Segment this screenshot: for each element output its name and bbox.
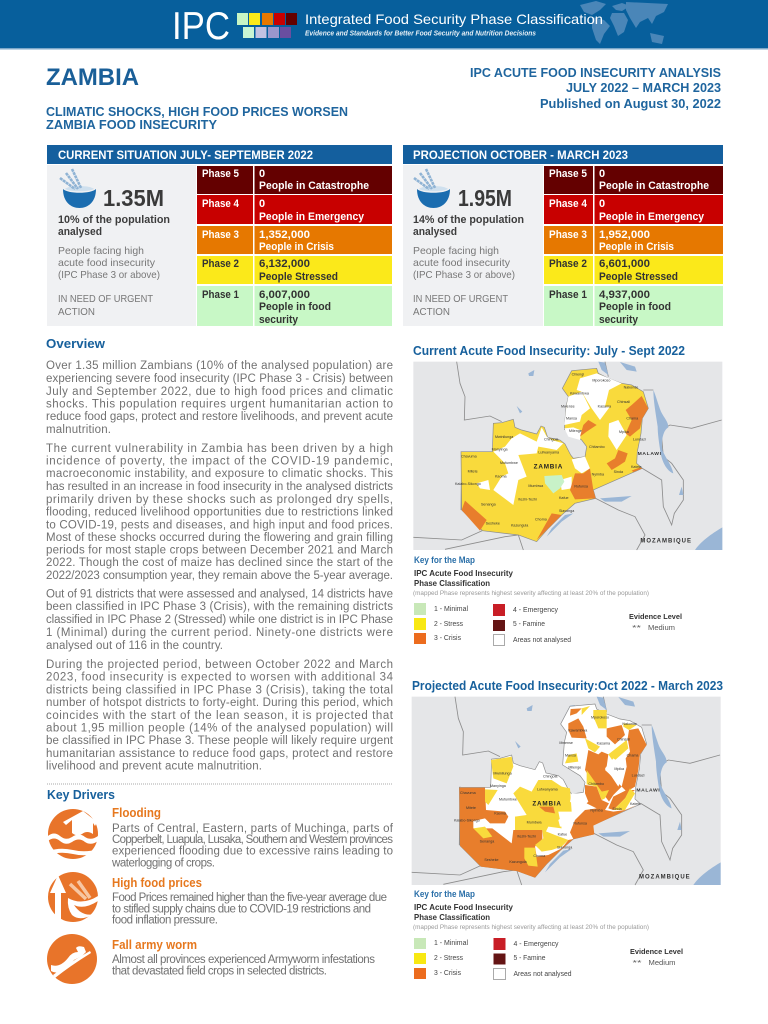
description: experienced flooding due to excessive rains leading to <box>112 846 393 858</box>
banner title: Integrated Food Security Phase Classification <box>305 11 603 27</box>
overview text block: 2022/2023 consumption year, they remain above the 5-year average. <box>46 570 393 582</box>
description: Copperbelt, Luapula, Lusaka, Southern and Western provinces <box>112 834 393 846</box>
map key: current: Phase Classification <box>414 578 490 588</box>
map: projected acute food insecurity <box>412 697 721 885</box>
logo colour squares <box>237 13 297 38</box>
map key: current: IPC Acute Food Insecurity <box>414 568 513 578</box>
phase 1 row: People in food <box>599 301 671 313</box>
summary box: IN NEED OF URGENT <box>413 293 509 305</box>
headline number: 1.35M <box>103 185 164 211</box>
map: current acute food insecurity: Mansa <box>566 417 578 421</box>
map: projected acute food insecurity: Sesheke <box>484 858 499 862</box>
map: projected acute food insecurity: Lundazi <box>632 774 645 778</box>
analysis title and dates <box>470 66 721 111</box>
map: projected acute food insecurity: Kaoma <box>494 811 507 815</box>
overview text block: malnutrition. <box>46 424 111 436</box>
overview text block: analysed out of 116 in the country. <box>46 640 223 652</box>
description <box>112 892 387 926</box>
map key: projected: Key for the Map <box>414 889 475 899</box>
map key: current: 3 - Crisis <box>434 635 461 642</box>
phase 2 row: People Stressed <box>259 271 338 283</box>
map: projected acute food insecurity: Sinda <box>612 807 623 811</box>
map: current acute food insecurity: Chama <box>626 417 639 421</box>
overview text block: The current vulnerability in Zambia has been driven by a high <box>46 443 393 455</box>
panel header <box>403 145 723 164</box>
summary box: ACTION <box>58 306 95 318</box>
map: projected acute food insecurity: Milenge <box>568 766 581 770</box>
map: current acute food insecurity: Choma <box>535 517 548 521</box>
panel header: CURRENT SITUATION JULY- SEPTEMBER 2022 <box>58 148 313 162</box>
panel header: PROJECTION OCTOBER - MARCH 2023 <box>413 148 628 162</box>
phase 2 row <box>544 256 723 284</box>
map key: current: Evidence Level <box>629 612 682 621</box>
driver: flooding <box>48 805 394 870</box>
map key: projected: Medium <box>648 958 676 967</box>
summary box: 10% of the population <box>58 214 170 226</box>
phase 1 row: Phase 1 <box>549 289 587 301</box>
map: projected acute food insecurity: Mporokoso <box>591 716 609 720</box>
phase 4 row: Phase 4 <box>202 198 240 210</box>
phase 3 row: 1,352,000 <box>259 229 310 241</box>
description: to stifled supply chains due to COVID-19 restrictions and <box>112 904 371 916</box>
map: projected acute food insecurity: Mufumbwe <box>499 798 517 802</box>
overview text block: to COVID-19, pests and diseases, and high input and food prices. <box>46 520 393 532</box>
map: projected acute food insecurity: Senanga <box>480 839 495 843</box>
phase 4 row: 0 <box>599 198 605 210</box>
map: current acute food insecurity: Chingola <box>544 438 559 442</box>
map: current acute food insecurity: Mumbwa <box>528 484 544 488</box>
map: current acute food insecurity: Kalabo-Sikongo <box>455 482 481 486</box>
map key: projected: 4 - Emergency <box>514 941 559 948</box>
map: current acute food insecurity: Mitete <box>468 469 478 473</box>
map: projected acute food insecurity: MOZAMBIQUE <box>639 875 690 881</box>
description <box>112 954 375 978</box>
overview text block: 2023, food insecurity is expected to worsen with additional 34 <box>46 672 394 684</box>
phase 1 row <box>544 286 723 326</box>
map key: current: (mapped Phase represents highest severity affecting at least 20% of the population) <box>413 590 649 597</box>
overview text block: has resulted in an increase in food insecurity in the analysed districts <box>46 481 393 493</box>
analysis title and dates: IPC ACUTE FOOD INSECURITY ANALYSIS <box>470 66 721 80</box>
map: current acute food insecurity: Sinda <box>614 470 624 474</box>
map: current acute food insecurity: Chavuma <box>461 454 478 458</box>
map: current acute food insecurity: MALAWI <box>638 451 662 457</box>
phase 4 row: Phase 4 <box>549 198 588 210</box>
map: projected acute food insecurity: Lufwanyama <box>537 787 559 791</box>
icon: flooded house <box>48 809 98 859</box>
overview text block: 2022. Though the cost of maize has declined since the start of the <box>46 557 393 569</box>
map: current acute food insecurity: Kazungula <box>511 524 529 528</box>
map: projected acute food insecurity: Mwense <box>559 741 573 745</box>
map: current acute food insecurity: Milenge <box>569 429 582 433</box>
icon: worm <box>47 934 97 984</box>
phase 4 row: People in Emergency <box>599 211 705 223</box>
map: current acute food insecurity: ZAMBIA <box>534 464 563 471</box>
overview text block: July and September 2022, due to high food prices and climatic <box>46 386 393 398</box>
phase 1 row <box>197 286 392 326</box>
projected map heading: Projected Acute Food Insecurity:Oct 2022 - March 2023 <box>412 678 723 693</box>
map: projected acute food insecurity: Rufunsa <box>573 821 588 825</box>
map key: projected: Phase Classification <box>414 912 490 922</box>
phase 5 row: 0 <box>599 168 605 180</box>
summary box: (IPC Phase 3 or above) <box>58 269 160 281</box>
panel header <box>47 145 392 164</box>
overview text block: humanitarian assistance to reduce food gaps, protect and restore <box>46 748 393 760</box>
summary box: acute food insecurity <box>413 257 511 269</box>
heading: High food prices <box>112 875 202 890</box>
map key: current: Medium <box>648 623 675 632</box>
overview text block: macroeconomic instability, and exposure to climatic shocks. This <box>46 468 393 480</box>
map key: projected: IPC Acute Food Insecurity <box>414 902 513 912</box>
map key: current: Key for the Map <box>414 555 475 565</box>
map: projected acute food insecurity: Chingola <box>543 775 558 779</box>
overview text block: During the projected period, between October 2022 and March <box>46 659 393 671</box>
map: current acute food insecurity: Lundazi <box>633 437 646 441</box>
driver: fall army worm <box>47 934 375 984</box>
overview text block: about 1,95 million people (14% of the analysed population) will <box>46 722 393 734</box>
map: projected acute food insecurity: Chama <box>627 753 639 757</box>
overview text block: classified in IPC Phase 2 (Stressed) while one district is in IPC Phase <box>46 614 393 626</box>
summary box <box>47 165 196 326</box>
map: projected acute food insecurity: Chitambo <box>588 782 604 786</box>
analysis title and dates: JULY 2022 – MARCH 2023 <box>566 81 721 95</box>
summary box: ACTION <box>413 306 450 318</box>
phase 3 row <box>197 226 392 254</box>
subtitle <box>46 105 348 132</box>
map: projected acute food insecurity: ZAMBIA <box>532 800 561 807</box>
phase 3 row: Phase 3 <box>549 229 587 241</box>
overview text block: shocks. This population requires urgent humanitarian action to <box>46 398 393 410</box>
current map heading: Current Acute Food Insecurity: July - Sept 2022 <box>413 343 685 358</box>
summary box: analysed <box>413 226 457 238</box>
map: current acute food insecurity: Itezhi-Tezhi <box>518 498 537 502</box>
phase 5 row: People in Catastrophe <box>599 180 709 192</box>
map: projected acute food insecurity: Mansa <box>565 753 577 757</box>
description: that devastated field crops in selected districts. <box>112 966 327 978</box>
description: food inflation pressure. <box>112 914 218 926</box>
summary box: 14% of the population <box>413 214 524 226</box>
map key: projected: 2 - Stress <box>434 955 463 962</box>
map key: projected: (mapped Phase represents highest severity affecting at least 20% of the population) <box>413 924 649 931</box>
phase 3 row <box>544 226 723 254</box>
phase 2 row: 6,132,000 <box>259 258 310 270</box>
map key: projected <box>413 889 683 980</box>
map: current acute food insecurity: Kawambwa <box>570 392 590 396</box>
map: current acute food insecurity: Katete <box>631 465 642 469</box>
map: current acute food insecurity: Siavonga <box>559 509 575 513</box>
map: current acute food insecurity: Kafue <box>559 496 569 500</box>
phase 2 row <box>197 256 392 284</box>
map: current acute food insecurity: Mporokoso <box>592 378 610 382</box>
phase 3 row: Phase 3 <box>202 229 239 241</box>
map: projected acute food insecurity: Mitete <box>466 806 476 810</box>
overview text block: Most of these shocks occurred during the flowering and grain filling <box>46 532 393 544</box>
description: Almost all provinces experienced Armyworm infestations <box>112 954 375 966</box>
map: current acute food insecurity: Nyimba <box>592 472 605 476</box>
overview text block: flooding, reduced livelihood opportunities due to restrictions linked <box>46 506 393 518</box>
phase 5 row: Phase 5 <box>202 168 239 180</box>
map: projected acute food insecurity: Kawambwa <box>568 729 588 733</box>
analysis title and dates: Published on August 30, 2022 <box>540 97 721 111</box>
panel: projection <box>403 145 723 326</box>
map key: projected: Areas not analysed <box>514 971 572 978</box>
banner tagline: Evidence and Standards for Better Food Security and Nutrition Decisions <box>305 28 536 38</box>
overview text block: incidence of poverty, the impact of the COVID-19 pandemic, <box>46 456 393 468</box>
icon: bowl with wheat <box>414 169 450 208</box>
description: waterlogging of crops. <box>111 858 215 870</box>
map: current acute food insecurity: Mpika <box>619 430 630 434</box>
heading: Fall army worm <box>112 937 197 952</box>
map: projected acute food insecurity: MALAWI <box>636 787 660 793</box>
map: projected acute food insecurity: Chavuma <box>460 791 477 795</box>
icon: bowl with wheat <box>60 169 96 208</box>
summary box: acute food insecurity <box>58 257 156 269</box>
map: current acute food insecurity: Chinsali <box>617 400 630 404</box>
headline number: 1.95M <box>458 185 512 211</box>
icon: rising arrow and bowl <box>48 872 98 922</box>
map: current acute food insecurity: Lufwanyama <box>538 451 560 455</box>
subtitle: ZAMBIA FOOD INSECURITY <box>46 118 218 132</box>
map key: current: ** <box>632 623 641 632</box>
map key: projected: ** <box>632 958 642 967</box>
phase 3 row: 1,952,000 <box>599 229 650 241</box>
map: current acute food insecurity: Mwinilunga <box>495 435 514 439</box>
phase 1 row: 6,007,000 <box>259 289 310 301</box>
map: current acute food insecurity: Rufunsa <box>574 485 589 489</box>
map: projected acute food insecurity: Nakonde <box>622 722 637 726</box>
panel: current situation <box>47 145 392 326</box>
description: Parts of Central, Eastern, parts of Muchinga, parts of <box>112 823 394 835</box>
overview text block: number of hotspot districts to forty-eight. During this period, which <box>46 697 393 709</box>
map: projected acute food insecurity: Choma <box>533 854 546 858</box>
driver: high food prices <box>48 872 387 926</box>
map: current acute food insecurity: Kasama <box>598 404 612 408</box>
map: current acute food insecurity: MOZAMBIQUE <box>640 539 691 545</box>
phase 3 row: People in Crisis <box>259 241 334 253</box>
map: projected acute food insecurity: Siavonga <box>557 846 573 850</box>
map: current acute food insecurity: Senanga <box>481 503 497 507</box>
overview text block: periods for most staple crops between December 2021 and March <box>46 544 393 556</box>
overview text block: Over 1.35 million Zambians (10% of the analysed population) are <box>46 360 393 372</box>
summary box: IN NEED OF URGENT <box>58 293 154 305</box>
overview text block: 1 (Minimal) during the current period. Ninety-one districts were <box>46 627 393 639</box>
phase 2 row: People Stressed <box>599 271 678 283</box>
map: projected acute food insecurity: Manyinga <box>490 784 507 788</box>
phase 1 row: security <box>599 314 639 326</box>
map: current acute food insecurity <box>413 362 722 550</box>
map: current acute food insecurity: Chitambo <box>589 445 605 449</box>
map: projected acute food insecurity: Mwinilunga <box>493 772 513 776</box>
map key: current <box>413 555 682 646</box>
map key: projected: 1 - Minimal <box>434 940 468 947</box>
summary box: People facing high <box>413 245 499 257</box>
phase 5 row: People in Catastrophe <box>259 180 369 192</box>
summary box <box>403 165 543 326</box>
map: projected acute food insecurity: Chinsali <box>617 737 630 741</box>
phase 1 row: People in food <box>259 301 331 313</box>
summary box: analysed <box>58 226 102 238</box>
map: projected acute food insecurity: Kalabo-Sikongo <box>454 819 480 823</box>
summary box: (IPC Phase 3 or above) <box>413 269 515 281</box>
map: current acute food insecurity: Mwense <box>561 404 575 408</box>
title: Zambia: ZAMBIA <box>46 64 139 91</box>
map: projected acute food insecurity: Mumbwa <box>527 821 542 825</box>
map: current acute food insecurity: Mufumbwe <box>500 461 518 465</box>
overview text block: Out of 91 districts that were assessed and analysed, 14 districts have <box>46 588 393 600</box>
world map watermark <box>580 1 668 44</box>
map: projected acute food insecurity: Nyimba <box>590 809 604 813</box>
map: current acute food insecurity: Manyinga <box>492 447 508 451</box>
map: projected acute food insecurity: Kafue <box>558 833 567 837</box>
overview text block: districts being classified in IPC Phase 3 (Crisis), taking the total <box>46 684 393 696</box>
phase 1 row: security <box>259 314 299 326</box>
map key: projected: 5 - Famine <box>514 955 546 962</box>
map: current acute food insecurity: Nakonde <box>624 386 638 390</box>
map key: current: 5 - Famine <box>513 621 545 628</box>
map key: projected: 3 - Crisis <box>434 970 461 977</box>
map: projected acute food insecurity: Mpika <box>614 767 625 771</box>
logo text IPC: IPC <box>172 5 230 48</box>
map key: current: 2 - Stress <box>434 621 463 628</box>
header banner <box>0 0 768 50</box>
summary box: People facing high <box>58 245 144 257</box>
phase 4 row <box>544 195 723 224</box>
overview text block: coincides with the start of the lean season, it is projected that <box>46 710 394 722</box>
overview text block: reduce food gaps, protect and restore livelihoods, and prevent acute <box>46 411 393 423</box>
map key: projected: Evidence Level <box>630 947 683 956</box>
map: projected acute food insecurity: Kazungula <box>509 860 528 864</box>
map: projected acute food insecurity: Kasama <box>597 741 611 745</box>
map key: current: 4 - Emergency <box>513 607 558 614</box>
phase 3 row: People in Crisis <box>599 241 674 253</box>
overview heading: Overview <box>46 336 106 351</box>
heading: Flooding <box>112 805 161 820</box>
description: Food Prices remained higher than the five-year average due <box>112 892 387 904</box>
phase 2 row: Phase 2 <box>549 258 587 270</box>
phase 5 row: Phase 5 <box>549 168 587 180</box>
phase 1 row: Phase 1 <box>202 289 239 301</box>
description <box>111 823 394 870</box>
overview text block: experiencing severe food insecurity (IPC Phase 3 - Crisis) between <box>46 373 393 385</box>
phase 5 row <box>544 166 723 194</box>
overview text block: be classified in IPC Phase 3. These people will likely require urgent <box>46 735 394 747</box>
map: current acute food insecurity: Kaoma <box>495 474 508 478</box>
map key: current: 1 - Minimal <box>434 606 468 613</box>
map: current acute food insecurity: Sesheke <box>486 522 500 526</box>
phase 1 row: 4,937,000 <box>599 289 650 301</box>
phase 2 row: Phase 2 <box>202 258 239 270</box>
map key: current: Areas not analysed <box>513 637 571 644</box>
phase 5 row <box>197 166 392 194</box>
subtitle: CLIMATIC SHOCKS, HIGH FOOD PRICES WORSEN <box>46 105 348 119</box>
phase 2 row: 6,601,000 <box>599 258 650 270</box>
key drivers heading: Key Drivers <box>47 787 115 802</box>
phase 4 row: People in Emergency <box>259 211 365 223</box>
map: projected acute food insecurity: Katete <box>630 802 641 806</box>
overview text block: primarily driven by these shocks such as prolonged dry spells, <box>46 494 393 506</box>
overview text block: livelihood and prevent acute malnutrition. <box>46 760 262 772</box>
overview text block <box>46 360 394 772</box>
map: projected acute food insecurity: Itezhi-Tezhi <box>517 834 536 838</box>
map: current acute food insecurity: Chiengi <box>572 372 584 376</box>
phase 4 row: 0 <box>259 198 265 210</box>
phase 5 row: 0 <box>259 168 265 180</box>
overview text block: been classified in IPC Phase 3 (Crisis), with the remaining districts <box>46 601 393 613</box>
phase 4 row <box>197 195 392 224</box>
